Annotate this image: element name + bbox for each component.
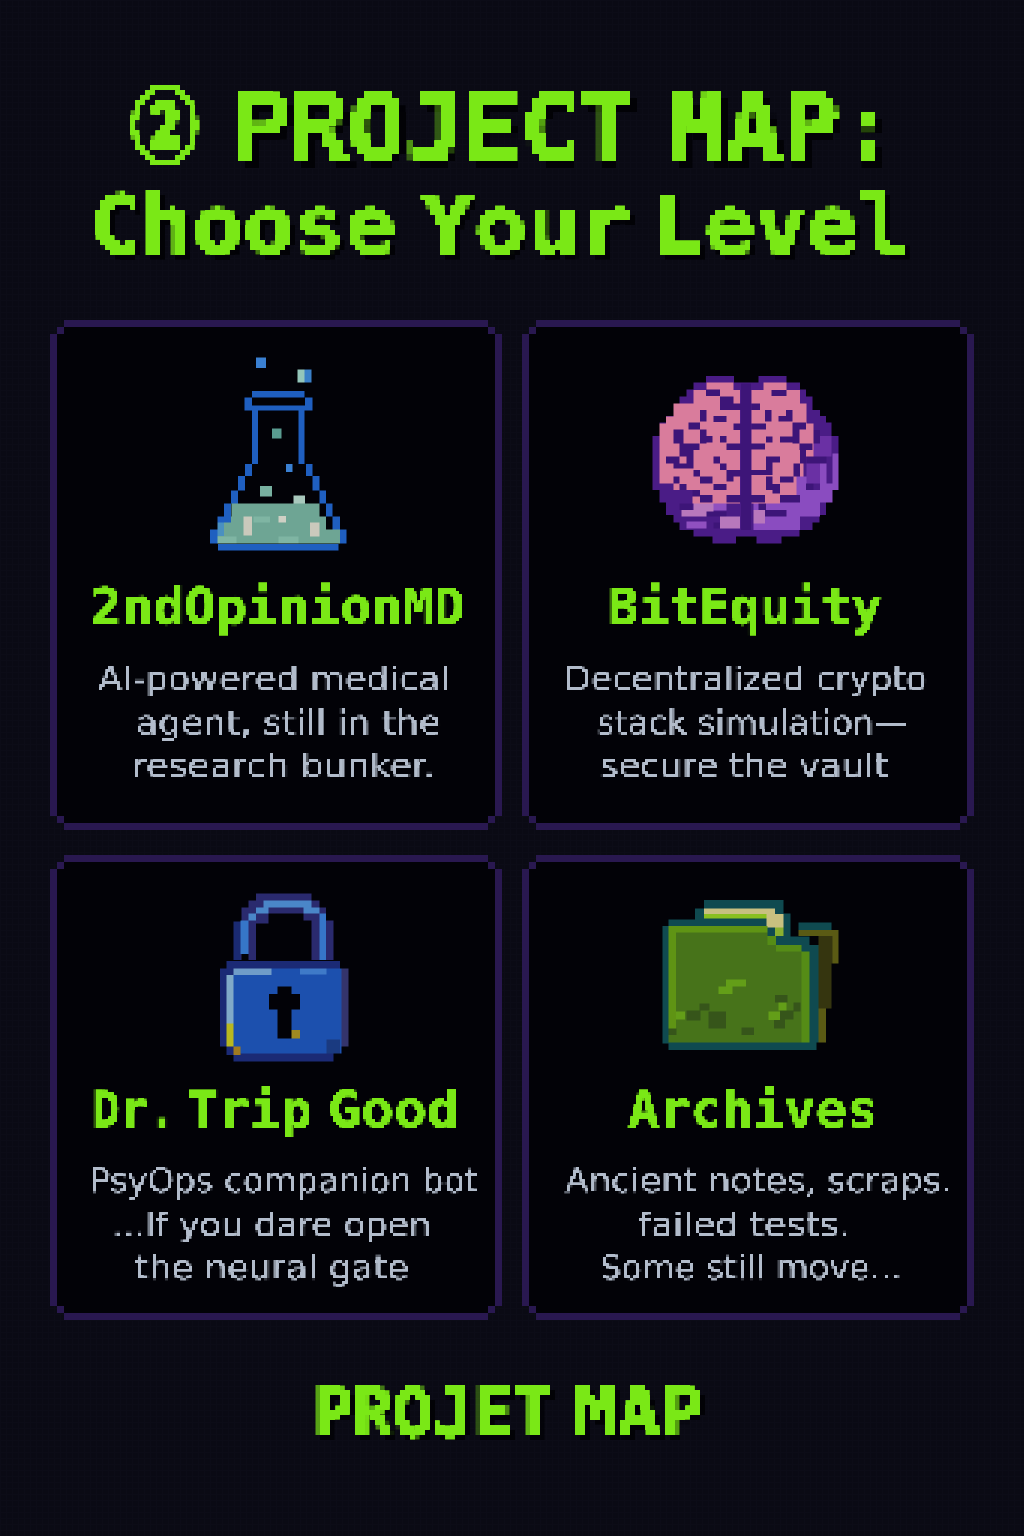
name: Dr. Trip Good: Good	[328, 1081, 460, 1139]
description: BitEquity: secure the vault	[600, 746, 888, 785]
name: Dr. Trip Good	[92, 1081, 460, 1139]
name: 2ndOpinionMD: 2ndOpinionMD	[91, 578, 465, 636]
description: BitEquity: Decentralized crypto	[564, 659, 927, 698]
description: BitEquity	[564, 659, 927, 785]
description: 2ndOpinionMD: AI-powered medical	[98, 659, 450, 698]
heading: project map: PROJECT	[238, 79, 640, 187]
description: Dr. Trip Good: ...If you dare open	[112, 1205, 431, 1244]
heading: project map: MAP	[673, 79, 845, 187]
heading: project map: :	[845, 79, 900, 187]
description: Archives: Some still move...	[600, 1248, 902, 1287]
description: Archives	[565, 1161, 952, 1287]
footer heading: PROJET	[317, 1378, 557, 1457]
heading: choose your level: Your	[421, 179, 633, 272]
description: 2ndOpinionMD	[98, 659, 450, 785]
name: Dr. Trip Good: Dr.	[92, 1081, 176, 1139]
footer heading: MAP	[578, 1378, 708, 1457]
name: BitEquity: BitEquity	[608, 578, 882, 636]
heading: choose your level	[90, 179, 913, 276]
panel: 2ndOpinionMD	[50, 320, 502, 830]
footer heading: MAP	[574, 1374, 704, 1453]
panel: Archives	[522, 855, 974, 1320]
description: Dr. Trip Good	[90, 1161, 478, 1287]
icon: flask	[210, 357, 347, 551]
panel: BitEquity	[522, 320, 974, 830]
heading: project map	[233, 74, 900, 187]
description: Dr. Trip Good: the neural gate	[135, 1248, 409, 1287]
description: Archives: Ancient notes, scraps.	[565, 1161, 952, 1200]
description: Archives: failed tests.	[638, 1205, 850, 1244]
heading: choose your level: Level	[657, 183, 913, 276]
icon: circled two: ②	[131, 79, 198, 177]
heading: project map: :	[840, 74, 895, 182]
name: Archives: Archives	[628, 1081, 878, 1139]
heading: choose your level: Your	[425, 183, 637, 276]
heading: project map: MAP	[668, 74, 840, 182]
description: 2ndOpinionMD: research bunker.	[132, 746, 435, 785]
heading: choose your level: Choose	[90, 179, 396, 272]
footer heading	[313, 1374, 708, 1457]
heading: choose your level: Level	[653, 179, 909, 272]
description: 2ndOpinionMD: agent, still in the	[136, 703, 441, 742]
description: BitEquity: stack simulation—	[597, 703, 908, 742]
heading: choose your level: Choose	[94, 183, 400, 276]
panel: Dr. Trip Good	[50, 855, 502, 1320]
icon: padlock	[220, 893, 348, 1062]
description: Dr. Trip Good: PsyOps companion bot	[90, 1161, 478, 1200]
title	[90, 74, 913, 276]
footer heading: PROJET	[313, 1374, 553, 1453]
icon: folder	[662, 900, 838, 1050]
icon: brain	[653, 376, 838, 543]
name: Dr. Trip Good: Trip	[188, 1081, 312, 1139]
heading: project map: PROJECT	[233, 74, 635, 182]
